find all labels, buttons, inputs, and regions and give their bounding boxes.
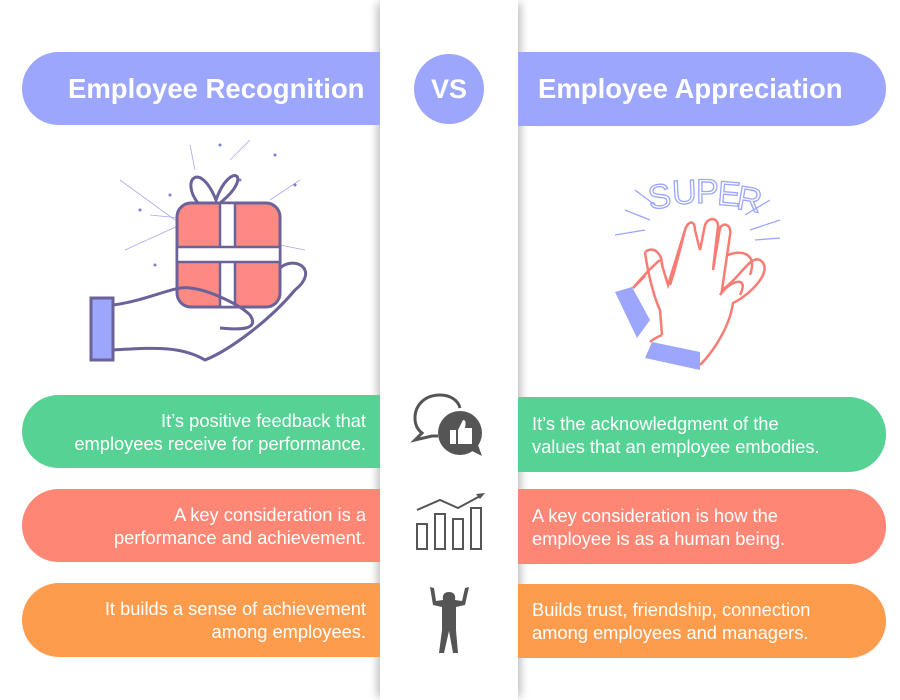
row 1 left	[22, 395, 380, 468]
row 1 right: It’s the acknowledgment of the	[532, 412, 779, 434]
icon: growth chart	[416, 493, 485, 550]
row 2 left	[22, 489, 380, 562]
illustration: clapping hands	[614, 173, 780, 370]
row 2 right: employee is as a human being.	[532, 528, 785, 548]
header: employee appreciation: Employee Appreciation	[538, 73, 843, 104]
row 2 right	[518, 489, 886, 564]
row 3 right: among employees and managers.	[532, 622, 808, 643]
row 2 left: A key consideration is a	[174, 504, 366, 524]
VS circle	[414, 54, 484, 124]
header: employee recognition: Employee Recognition	[68, 72, 364, 104]
header: employee recognition	[22, 52, 380, 125]
row 3 left: It builds a sense of achievement	[105, 598, 366, 619]
row 2 right: A key consideration is how the	[532, 504, 778, 526]
row 2 left: performance and achievement.	[114, 526, 366, 548]
illustration: gift in hand	[90, 140, 308, 362]
center column	[380, 0, 518, 700]
header: employee appreciation	[518, 52, 886, 126]
row 3 right	[518, 584, 886, 658]
icon: feedback thumbs up	[410, 394, 482, 456]
row 1 right: values that an employee embodies.	[532, 436, 820, 456]
VS circle: VS	[431, 74, 467, 104]
illustration: clapping hands: U	[671, 173, 698, 212]
illustration: clapping hands: P	[696, 173, 719, 211]
row 3 left: among employees.	[212, 621, 366, 642]
illustration: clapping hands: S	[646, 177, 674, 217]
row 3 left	[22, 583, 380, 657]
row 3 right: Builds trust, friendship, connection	[532, 599, 810, 620]
row 1 right	[518, 397, 886, 472]
illustration: clapping hands: R	[734, 179, 765, 221]
illustration: clapping hands: E	[716, 174, 742, 214]
icon: victory person	[430, 587, 469, 653]
row 1 left: employees receive for performance.	[74, 432, 366, 454]
row 1 left: It’s positive feedback that	[161, 410, 366, 430]
